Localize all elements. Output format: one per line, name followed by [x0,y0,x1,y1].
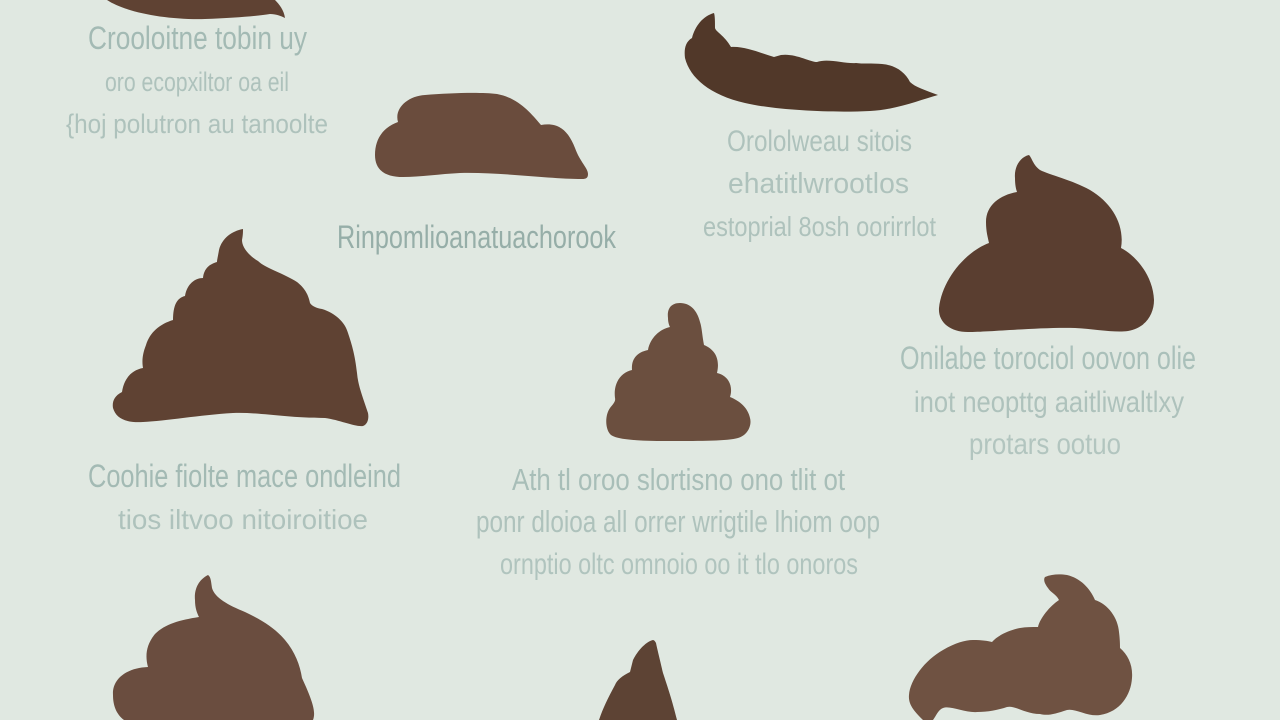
text block: left caption: tios iltvoo nitoiroitioe [118,504,368,535]
text block: top-left caption [66,20,328,139]
text block: right caption: Onilabe torociol oovon olie [900,340,1196,376]
text block: top-right caption: estoprial 8osh oorirrlot [703,211,936,242]
text block: right caption: protars ootuo [969,428,1121,461]
icon: large swirl stool, right [939,155,1154,332]
text block: top-left caption: {hoj polutron au tanoolte [66,109,328,139]
text block: top-left caption: Crooloitne tobin uy [88,20,307,56]
text block: right caption: inot neopttg aaitliwaltlxy [914,386,1184,419]
text block: top-right caption: Orololweau sitois [727,125,912,158]
text block: top-right caption [703,125,936,242]
text block: top-left caption: oro ecopxiltor oa eil [105,67,289,97]
text block: centre caption: ornptio oltc omnoio oo it tlo onoros [500,548,858,581]
text block: centre caption: ponr dloioa all orrer wrigtile lhiom oop [476,504,880,539]
icon: large layered stool, left [113,229,368,426]
text block: centre caption [476,462,880,581]
icon: small layered stool, centre [606,303,750,441]
icon: flat cloud-shaped stool [375,93,588,179]
text block: right caption [900,340,1196,461]
text block: top-right caption: ehatitlwrootlos [728,168,909,200]
icon: bottom-right stool [909,574,1132,720]
text block: left caption [88,458,401,535]
icon: bottom-centre stool tip [599,640,677,720]
text block: left caption: Coohie fiolte mace ondleind [88,458,401,494]
icon: bottom-left stool [113,575,314,720]
heading: Rinpomlioanatuachorook [337,219,617,255]
text block: centre caption: Ath tl oroo slortisno ono tlit ot [512,462,845,497]
icon: long sausage-shaped stool [685,13,938,112]
icon: top-left partial stool shape [107,0,285,19]
